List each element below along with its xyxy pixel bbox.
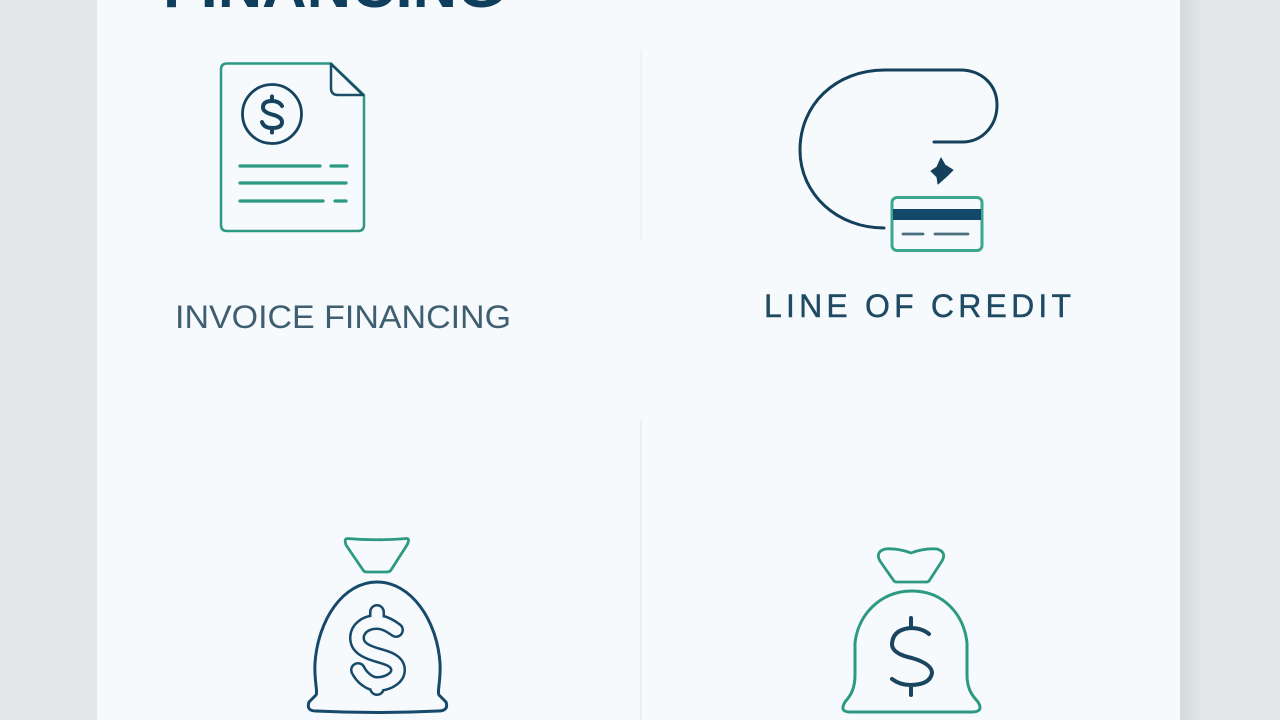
label: invoice financing: INVOICE FINANCING [175,299,511,335]
icon: invoice document [221,64,364,231]
label: line of credit: LINE OF CREDIT [764,288,1071,324]
icon: money bag left [308,538,447,712]
icon: line of credit [800,70,997,250]
icon: money bag right [843,549,980,712]
